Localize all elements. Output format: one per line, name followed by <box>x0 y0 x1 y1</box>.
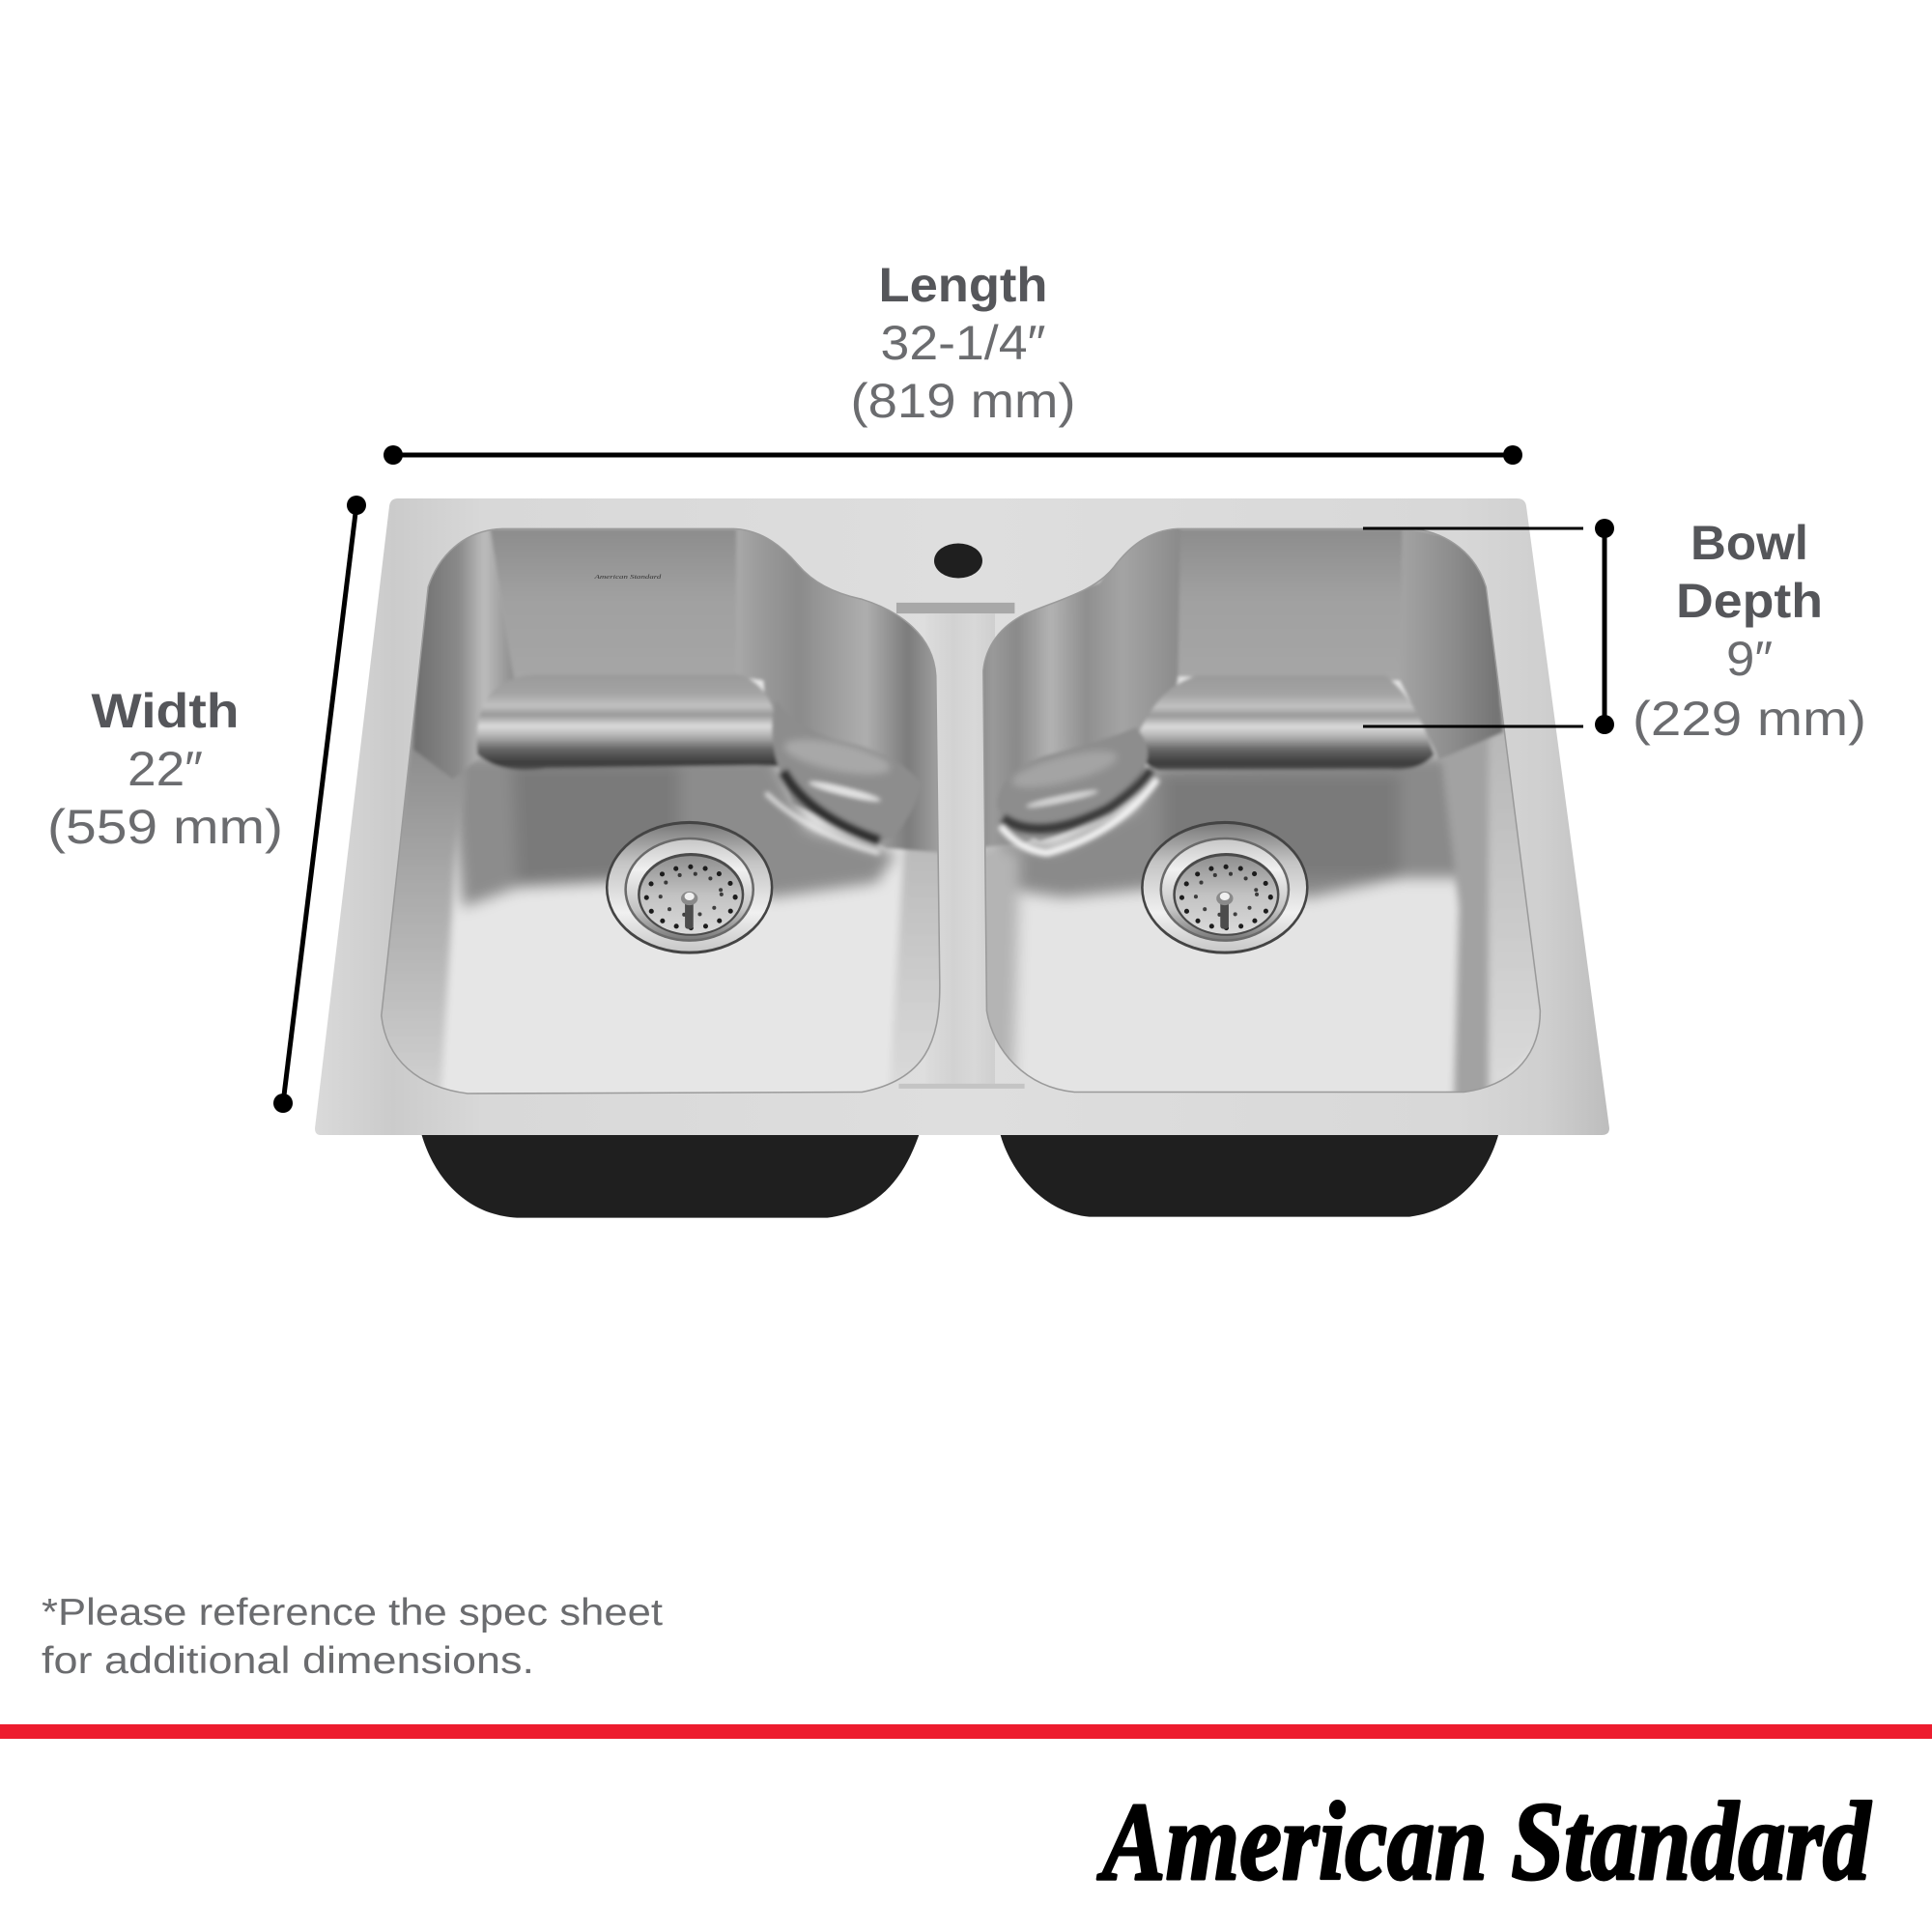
label: length: Length <box>879 258 1047 312</box>
left bowl side walls <box>369 661 951 1099</box>
right bowl <box>982 527 1542 1094</box>
dimension line: length <box>384 445 1522 465</box>
footnote: *Please reference the spec sheet <box>42 1592 663 1634</box>
left bowl floor shading <box>448 754 896 907</box>
left bowl ledge <box>477 674 785 770</box>
left bowl <box>381 527 941 1094</box>
small logo on bowl wall: American Standard <box>593 574 662 581</box>
right bowl ledge <box>1136 675 1435 770</box>
left bowl left upper wall <box>413 527 515 780</box>
left bowl underside <box>421 1131 920 1218</box>
right drain strainer <box>1141 821 1309 954</box>
label: bowl depth: Depth <box>1676 574 1823 628</box>
label: length: (819 mm) <box>850 374 1076 428</box>
dimension line: bowl depth <box>1363 519 1614 734</box>
right bowl upper left wall <box>971 526 1180 848</box>
right bowl floor shading <box>996 754 1479 897</box>
faucet hole <box>934 543 982 578</box>
left bowl upper right wall <box>736 526 946 853</box>
right bowl corner bulge <box>997 727 1157 853</box>
label: width: Width <box>91 684 240 738</box>
left bowl back wall <box>490 527 739 680</box>
right bowl back wall <box>1178 527 1407 680</box>
center divider <box>896 603 1025 1089</box>
label: width <box>47 684 283 854</box>
red divider bar <box>0 1724 1932 1739</box>
label: width: 22″ <box>128 742 203 796</box>
left bowl corner bulge <box>766 700 921 853</box>
sink flange <box>315 498 1609 1135</box>
label: length: 32-1/4″ <box>881 316 1045 370</box>
label: bowl depth: Bowl <box>1690 516 1808 570</box>
right bowl side walls <box>971 710 1552 1099</box>
sink product illustration <box>315 498 1609 1218</box>
label: bowl depth: (229 mm) <box>1633 692 1866 746</box>
footnote <box>42 1592 663 1682</box>
label: length <box>850 258 1076 428</box>
right bowl upper right wall <box>1400 526 1503 759</box>
label: bowl depth: 9″ <box>1726 632 1773 686</box>
label: width: (559 mm) <box>47 800 283 854</box>
footnote: for additional dimensions. <box>42 1640 534 1682</box>
left drain strainer <box>606 821 773 954</box>
dimension line: width <box>273 496 366 1113</box>
label: bowl depth <box>1633 516 1866 746</box>
right bowl underside <box>1000 1131 1499 1217</box>
